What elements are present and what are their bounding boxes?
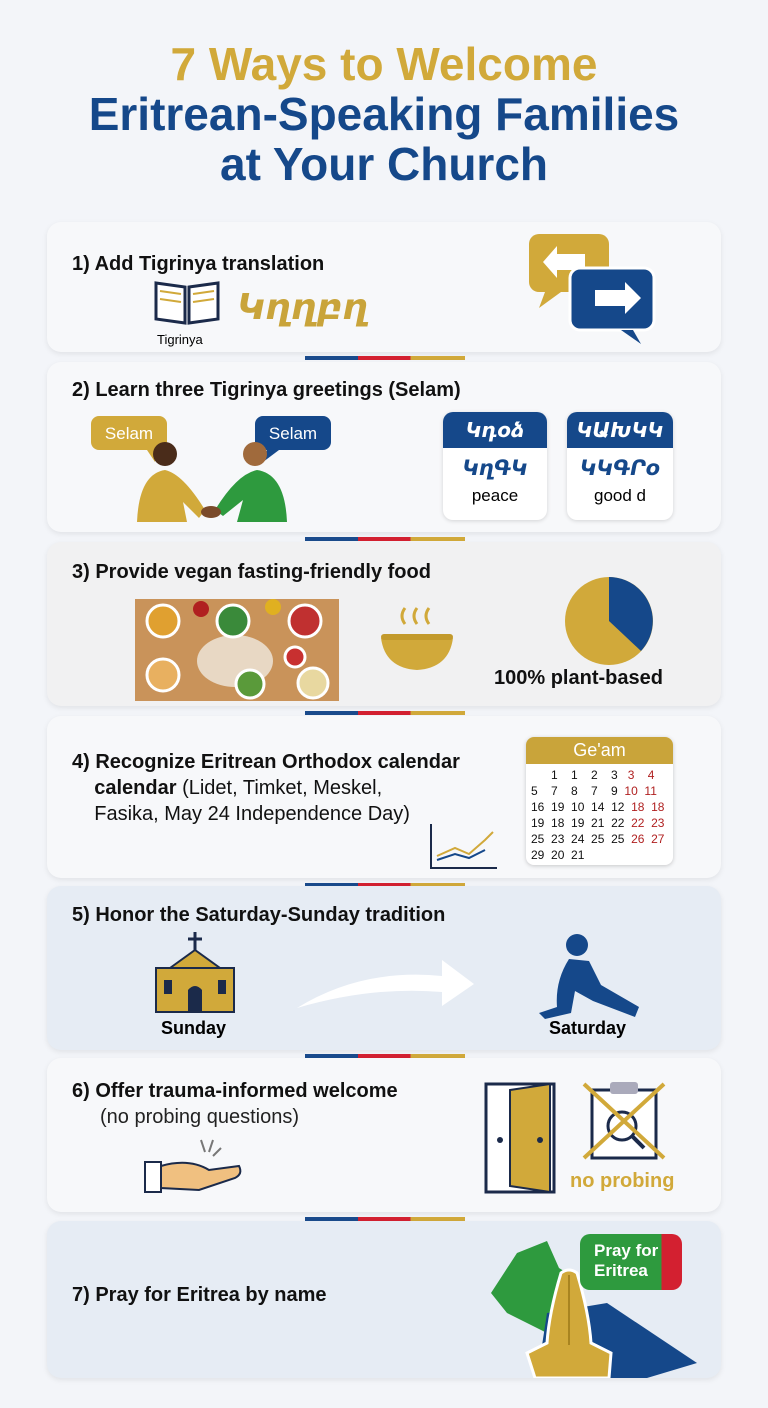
- card: greeting 1: ԿղԳԿ: [462, 456, 528, 480]
- icon: book: [154, 281, 220, 325]
- panel 5: saturday-sunday: 5) Honor the Saturday-Sunday tradition: [72, 904, 445, 926]
- card: greeting 1: Կդօձ: [466, 418, 524, 442]
- illustration: handshake: Selam: [105, 424, 153, 443]
- panel 1: translation: Tigrinya: [157, 332, 203, 347]
- panel 3: food: [47, 542, 721, 706]
- calendar: 1 1 2 3 3 4 5 7 8 7 9 10 11 16 19 10 14 12 18 18 19 18 19 21 22 22 23 25 23 24 25 25 26 27 29 20 21: [531, 768, 664, 862]
- icon: resting person: [539, 934, 639, 1019]
- callout: pray for Eritrea: [580, 1234, 682, 1290]
- icon: open door: [484, 1082, 556, 1194]
- card: greeting 2: ԿԿԳՐօ: [580, 456, 660, 480]
- title: Eritrean-Speaking Families: [89, 88, 679, 140]
- panel 6: trauma-informed: no probing: [570, 1170, 674, 1192]
- panel 4: calendar: [47, 716, 721, 878]
- card: greeting 2: ԿԱԽԿԿ: [576, 418, 664, 442]
- panel 4: calendar: 4) Recognize Eritrean Orthodox calendar: [72, 751, 460, 773]
- icon: crossed clipboard: [582, 1082, 666, 1160]
- card: greeting 2: [567, 412, 673, 520]
- calendar: Ge'am: [573, 740, 626, 760]
- title: at Your Church: [220, 138, 548, 190]
- icon: bowl: [381, 607, 453, 670]
- title: [89, 38, 679, 190]
- panel 5: saturday-sunday: Saturday: [549, 1018, 626, 1038]
- pie chart: [565, 577, 653, 665]
- panel 7: pray: [47, 1221, 721, 1378]
- illustration: handshake: [91, 416, 331, 522]
- card: greeting 1: peace: [472, 486, 518, 505]
- panel 1: translation: 1) Add Tigrinya translation: [72, 253, 324, 275]
- panel 6: trauma-informed: [47, 1058, 721, 1212]
- panel 5: saturday-sunday: Sunday: [161, 1018, 226, 1038]
- panel 1: translation: [47, 222, 721, 352]
- icon: line chart: [430, 824, 497, 869]
- Tigrinya script: Կղղբղ: [237, 287, 368, 328]
- panel 6: trauma-informed: (no probing questions): [100, 1106, 299, 1128]
- illustration: map and praying hands: [491, 1241, 697, 1378]
- panel 3: food: 100% plant-based: [494, 667, 663, 689]
- illustration: handshake: Selam: [269, 424, 317, 443]
- panel 7: pray: 7) Pray for Eritrea by name: [72, 1284, 327, 1306]
- icon: open hand: [144, 1140, 242, 1193]
- panel 6: trauma-informed: 6) Offer trauma-informed welcome: [72, 1080, 398, 1102]
- calendar: [526, 737, 673, 865]
- panel 4: calendar: calendar (Lidet, Timket, Meskel,: [94, 777, 382, 799]
- panel 2: greetings: [47, 362, 721, 532]
- card: greeting 2: good d: [594, 486, 646, 505]
- callout: pray for Eritrea: Eritrea: [594, 1261, 648, 1280]
- arrow: [298, 960, 474, 1008]
- panel 3: food: 3) Provide vegan fasting-friendly food: [72, 561, 431, 583]
- icon: church: [155, 932, 235, 1013]
- illustration: food platter: [135, 599, 339, 701]
- panel 4: calendar: Fasika, May 24 Independence Day): [94, 803, 410, 825]
- callout: pray for Eritrea: Pray for: [594, 1241, 658, 1260]
- panel 5: saturday-sunday: [47, 886, 721, 1050]
- panel 2: greetings: 2) Learn three Tigrinya greetings (Selam): [72, 379, 461, 401]
- title: 7 Ways to Welcome: [171, 38, 597, 90]
- icon: translation bubbles: [529, 234, 652, 344]
- card: greeting 1: [443, 412, 547, 520]
